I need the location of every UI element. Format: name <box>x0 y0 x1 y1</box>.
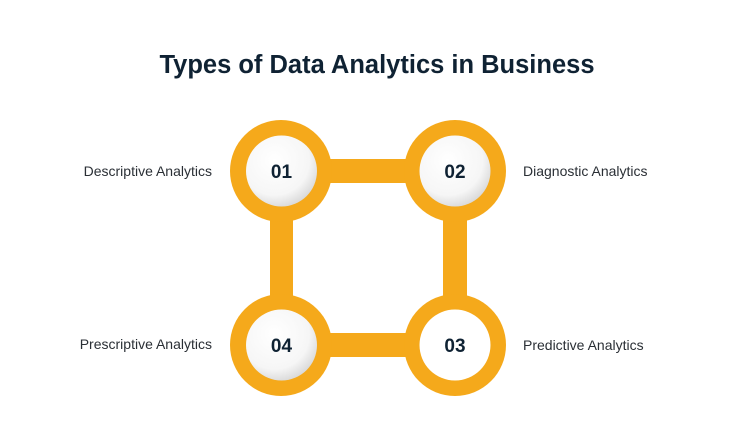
node 01: 01 <box>271 162 292 183</box>
label: diagnostic: Diagnostic Analytics <box>523 163 648 179</box>
node 03: 03 <box>444 336 466 357</box>
label: predictive: Predictive Analytics <box>523 337 644 353</box>
node 04: 04 <box>271 336 292 357</box>
node 04 <box>230 294 332 396</box>
node 01 <box>230 120 332 222</box>
node 02: 02 <box>444 162 466 183</box>
node 03 <box>404 294 506 396</box>
label: prescriptive: Prescriptive Analytics <box>80 336 212 352</box>
connectors <box>270 159 467 357</box>
label: descriptive: Descriptive Analytics <box>84 163 212 179</box>
title: Types of Data Analytics in Business <box>159 51 595 79</box>
node 02 <box>404 120 506 222</box>
